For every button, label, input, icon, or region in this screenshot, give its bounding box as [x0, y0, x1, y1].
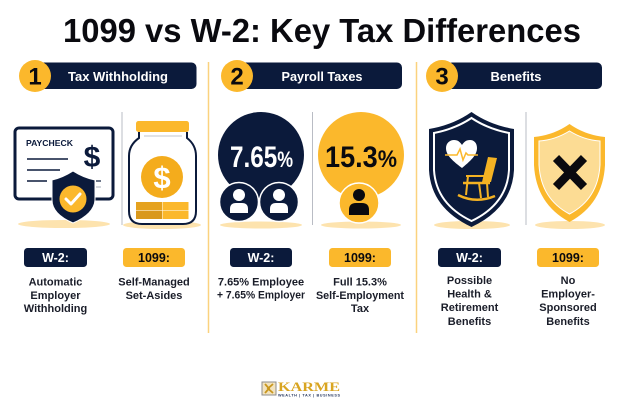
text: no employer-sponsored benefits: No: [561, 275, 576, 287]
icon: paycheck with shield: $: [84, 141, 101, 174]
icon: shield with X: [534, 124, 605, 229]
icon: 7.65% circle with two people: [218, 112, 304, 228]
label: W-2 pill: [24, 248, 87, 267]
heading: benefits: 3: [435, 64, 449, 90]
label: W-2 pill: W-2:: [248, 251, 274, 265]
text: automatic employer withholding: Withholding: [24, 303, 87, 315]
logo: Karme: [262, 379, 340, 398]
logo: Karme: WEALTH | TAX | BUSINESS: [278, 394, 340, 398]
text: 7.65% employee + 7.65% employer: 7.65% Employee: [218, 276, 304, 288]
panel: payroll taxes: [217, 60, 404, 315]
icon: paycheck with shield: PAYCHECK: [26, 138, 74, 148]
label: 1099 pill: [123, 248, 185, 267]
label: 1099 pill: [537, 248, 599, 267]
heading: tax withholding: [19, 60, 196, 92]
icon: paycheck with shield: [15, 128, 113, 228]
panel: tax withholding: [15, 60, 201, 315]
text: self-managed set-asides: Self-Managed: [118, 276, 190, 288]
heading: benefits: Benefits: [490, 70, 542, 84]
heading: tax withholding: Tax Withholding: [68, 70, 168, 84]
title: 1099 vs W-2: Key Tax Differences: [63, 12, 581, 49]
text: possible health and retirement benefits: Retirement: [441, 302, 499, 314]
panel: benefits: [426, 60, 605, 328]
label: 1099 pill: 1099:: [138, 251, 170, 265]
text: automatic employer withholding: Employer: [30, 290, 81, 302]
heading: payroll taxes: 2: [230, 64, 244, 90]
text: no employer-sponsored benefits: Sponsored: [539, 302, 597, 314]
text: 7.65% employee + 7.65% employer: + 7.65% Employer: [217, 290, 306, 302]
text: no employer-sponsored benefits: Employer-: [541, 288, 595, 300]
label: W-2 pill: [230, 248, 292, 267]
heading: benefits: [426, 60, 602, 92]
text: possible health and retirement benefits: Health &: [447, 288, 492, 300]
icon: savings jar: $: [153, 160, 171, 195]
icon: health and retirement shield: [429, 112, 514, 229]
heading: payroll taxes: Payroll Taxes: [282, 70, 363, 84]
label: 1099 pill: 1099:: [552, 251, 584, 265]
label: 1099 pill: 1099:: [344, 251, 376, 265]
text: full 15.3% self-employment tax: Self-Employment: [316, 290, 404, 302]
text: full 15.3% self-employment tax: Full 15.3%: [333, 276, 387, 288]
text: possible health and retirement benefits: Benefits: [448, 316, 491, 328]
icon: savings jar: [123, 121, 201, 229]
logo: Karme: KARME: [278, 379, 340, 394]
heading: tax withholding: 1: [28, 64, 42, 90]
label: W-2 pill: W-2:: [42, 251, 69, 265]
icon: rocking chair: [458, 157, 497, 200]
text: full 15.3% self-employment tax: Tax: [351, 303, 370, 315]
label: W-2 pill: W-2:: [456, 251, 483, 265]
text: no employer-sponsored benefits: Benefits: [546, 316, 590, 328]
label: W-2 pill: [438, 248, 501, 267]
text: self-managed set-asides: Set-Asides: [126, 290, 182, 302]
icon: 7.65% circle with two people: 7.65%: [230, 141, 293, 174]
label: 1099 pill: [329, 248, 391, 267]
icon: 15.3% circle with one person: [318, 112, 404, 228]
icon: heart with pulse: [445, 140, 478, 168]
text: automatic employer withholding: Automatic: [29, 276, 82, 288]
text: possible health and retirement benefits: Possible: [447, 275, 492, 287]
icon: 15.3% circle with one person: 15.3%: [325, 141, 397, 174]
heading: payroll taxes: [221, 60, 402, 92]
